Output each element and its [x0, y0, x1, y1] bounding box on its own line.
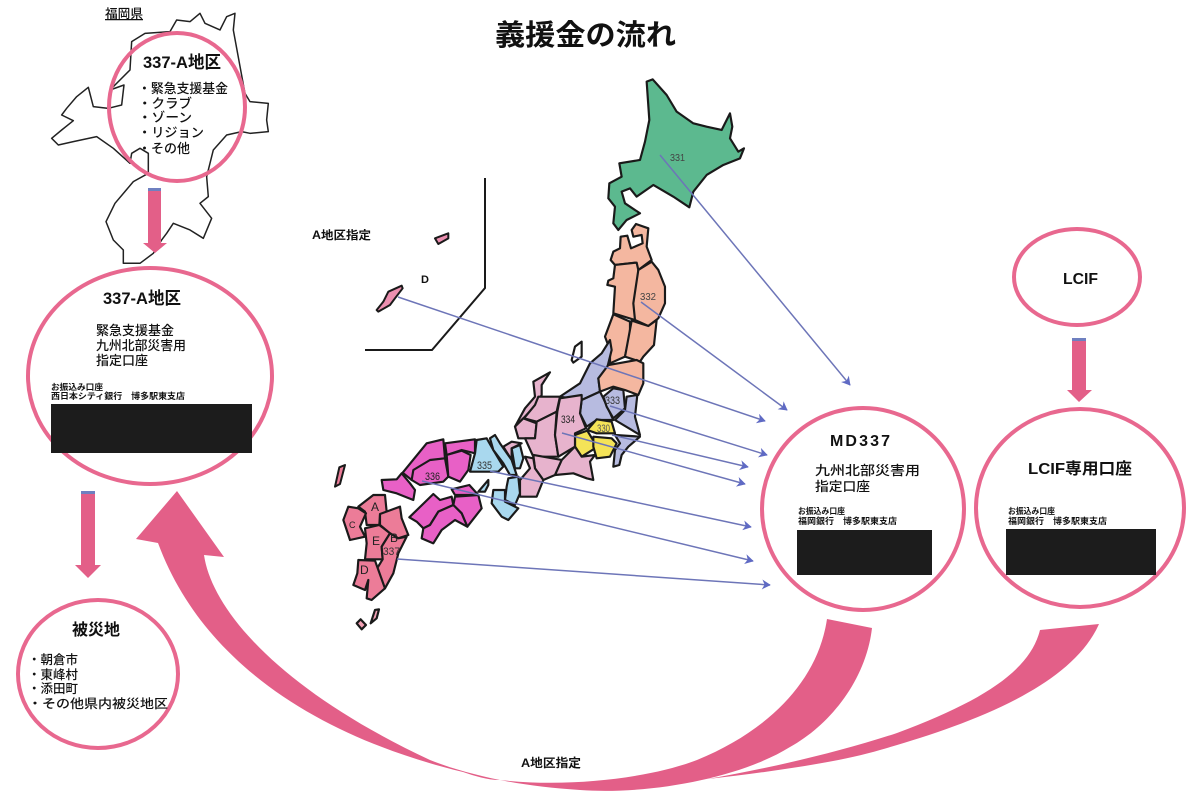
map labels: E	[372, 534, 380, 548]
Tanegashima and Yakushima	[371, 609, 379, 623]
redacted account number	[1006, 529, 1156, 575]
map labels: A	[371, 500, 379, 514]
map labels: 334	[561, 414, 575, 426]
region 331: Hokkaido	[608, 79, 744, 230]
panel: 337-A district account: 九州北部災害用	[96, 338, 186, 353]
map labels: 331	[670, 153, 685, 164]
panel: 337-A district sources: ・緊急支援基金	[138, 81, 228, 96]
map labels: 335	[477, 460, 492, 472]
map labels: 336	[425, 471, 440, 483]
panel: LCIF: LCIF	[1063, 271, 1098, 288]
panel: LCIF dedicated account: LCIF専用口座	[1028, 459, 1132, 478]
curved arrow tail: from LCIF account	[708, 624, 1099, 779]
map labels: D	[360, 563, 369, 577]
panel: 337-A district account: お振込み口座	[51, 382, 103, 392]
map labels: 333	[605, 395, 620, 407]
panel: 337-A district account: 指定口座	[96, 353, 148, 368]
panel: MD337 account: 九州北部災害用	[815, 463, 920, 478]
panel: 337-A district sources: ・その他	[138, 141, 190, 156]
panel: 337-A district sources: ・ゾーン	[138, 110, 192, 125]
region 333: Kanto	[560, 340, 640, 467]
panel: disaster area: ・朝倉市	[28, 652, 78, 667]
panel: disaster area: 被災地	[72, 621, 120, 639]
panel: 337-A district account: 西日本シティ銀行 博多駅東支店	[51, 391, 186, 401]
panel: MD337 account: 福岡銀行 博多駅東支店	[798, 516, 898, 526]
panel: MD337 account: 指定口座	[815, 479, 870, 494]
panel: disaster area	[18, 600, 178, 748]
Fukushima	[598, 360, 643, 395]
panel: 337-A district account: 緊急支援基金	[96, 323, 174, 338]
panel: MD337 account	[762, 408, 964, 610]
panel: disaster area: ・その他県内被災地区	[28, 696, 168, 711]
region 334: Chubu	[515, 372, 595, 497]
panel: 337-A district account: 337-A地区	[103, 289, 181, 308]
panel: MD337 account: MD337	[830, 433, 890, 450]
map labels: B	[390, 531, 398, 545]
panel: 337-A district sources: 337-A地区	[143, 53, 221, 72]
regions 330, 333, 334: Kanto and Chubu	[515, 340, 643, 497]
big curved arrow: into 337-A	[136, 491, 872, 791]
panel: LCIF dedicated account: 福岡銀行 博多駅東支店	[1008, 516, 1108, 526]
panel: 337-A district sources	[109, 33, 245, 181]
arrow: district account to disaster area	[75, 491, 101, 578]
map: Japan	[335, 79, 744, 629]
panel: LCIF dedicated account: お振込み口座	[1008, 506, 1055, 516]
region 332: Tohoku north	[605, 224, 665, 363]
redacted account number	[51, 404, 252, 453]
Tsushima	[335, 465, 345, 487]
region 330: Tokyo area	[575, 419, 617, 458]
title: 義援金の流れ	[495, 19, 676, 52]
panel: disaster area: ・東峰村	[28, 667, 78, 682]
label: Fukuoka: 福岡県	[105, 6, 143, 21]
text: A district designation: A地区指定	[521, 755, 581, 770]
panel: 337-A district account	[28, 268, 272, 484]
map labels: C	[349, 520, 356, 530]
panel: MD337 account: お振込み口座	[798, 506, 845, 516]
arrow: LCIF to LCIF account	[1067, 338, 1092, 402]
panel: LCIF dedicated account	[976, 409, 1184, 607]
map labels	[349, 153, 685, 577]
text: A district designation on map: A地区指定	[312, 228, 372, 242]
map: Fukuoka prefecture outline	[52, 6, 268, 263]
panel: disaster area: ・添田町	[28, 682, 78, 696]
Sado island	[572, 342, 582, 363]
map labels: 337	[383, 546, 400, 558]
inset: Okinawa islands	[365, 178, 485, 350]
panel: 337-A district sources: ・リジョン	[138, 125, 204, 140]
map labels: 332	[640, 292, 656, 303]
connector lines: districts to MD337	[397, 155, 850, 585]
panel: 337-A district sources: ・クラブ	[138, 96, 192, 111]
arrow: sources to district account	[143, 188, 167, 253]
regions 335, 336: Kinki, Chugoku, Shikoku	[382, 435, 523, 543]
panel: LCIF	[1014, 229, 1140, 325]
region 337: Kyushu	[343, 495, 408, 629]
redacted account number	[797, 530, 932, 575]
map labels: 330	[597, 423, 610, 435]
text: inset letter D: D	[421, 274, 429, 286]
